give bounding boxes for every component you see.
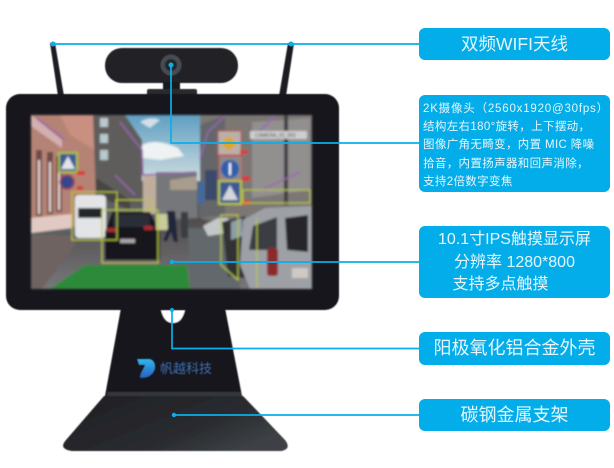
background car and pedestrian	[156, 214, 168, 230]
callout lines	[53, 44, 419, 415]
monitor body	[6, 94, 339, 310]
stand neck and base	[63, 308, 288, 451]
logo on stand	[137, 359, 212, 378]
screen image: street scene	[31, 115, 312, 289]
black suv	[105, 212, 160, 260]
callout: camera specs	[419, 95, 610, 192]
callout: dual-band wifi antenna: 双频WIFI天线	[461, 34, 568, 54]
purple outlines	[37, 116, 300, 195]
detection boxes	[72, 190, 310, 288]
logo on stand: 帆越科技	[160, 361, 212, 376]
right cars	[203, 218, 228, 236]
callout: camera specs: 图像广角无畸变，内置 MIC 降噪	[423, 139, 594, 151]
white van	[75, 195, 106, 238]
callout: touch display specs: 10.1寸IPS触摸显示屏	[438, 231, 591, 248]
icon: right antenna	[279, 43, 294, 96]
callout: dual-band wifi antenna	[419, 28, 610, 60]
sky	[125, 115, 207, 181]
callout: aluminium shell	[419, 332, 610, 365]
icon: left antenna	[50, 43, 64, 96]
callout: camera specs: 拾音，内置扬声器和回声消除，	[423, 158, 589, 170]
road bottom right	[188, 228, 240, 289]
green lane	[50, 265, 190, 289]
traffic signs	[59, 153, 77, 172]
left buildings	[31, 115, 96, 232]
camera	[105, 48, 238, 97]
callout: touch display specs: 分辨率 1280*800	[454, 254, 575, 270]
callout: carbon steel stand: 碳钢金属支架	[460, 405, 568, 425]
callout: camera specs: 支持2倍数字变焦	[423, 176, 513, 188]
screen image: street scene: CAMERA_01_001	[255, 133, 296, 139]
callout: carbon steel stand	[419, 399, 610, 431]
callout: aluminium shell: 阳极氧化铝合金外壳	[434, 338, 596, 358]
callout: camera specs: 2K摄像头（2560x1920@30fps）	[423, 103, 609, 115]
right buildings	[200, 115, 312, 225]
callout: touch display specs	[419, 226, 610, 298]
callout dots	[50, 42, 294, 417]
callout: camera specs: 结构左右180°旋转，上下摆动，	[423, 121, 590, 133]
road	[31, 218, 312, 289]
callout: touch display specs: 支持多点触摸	[452, 276, 548, 293]
